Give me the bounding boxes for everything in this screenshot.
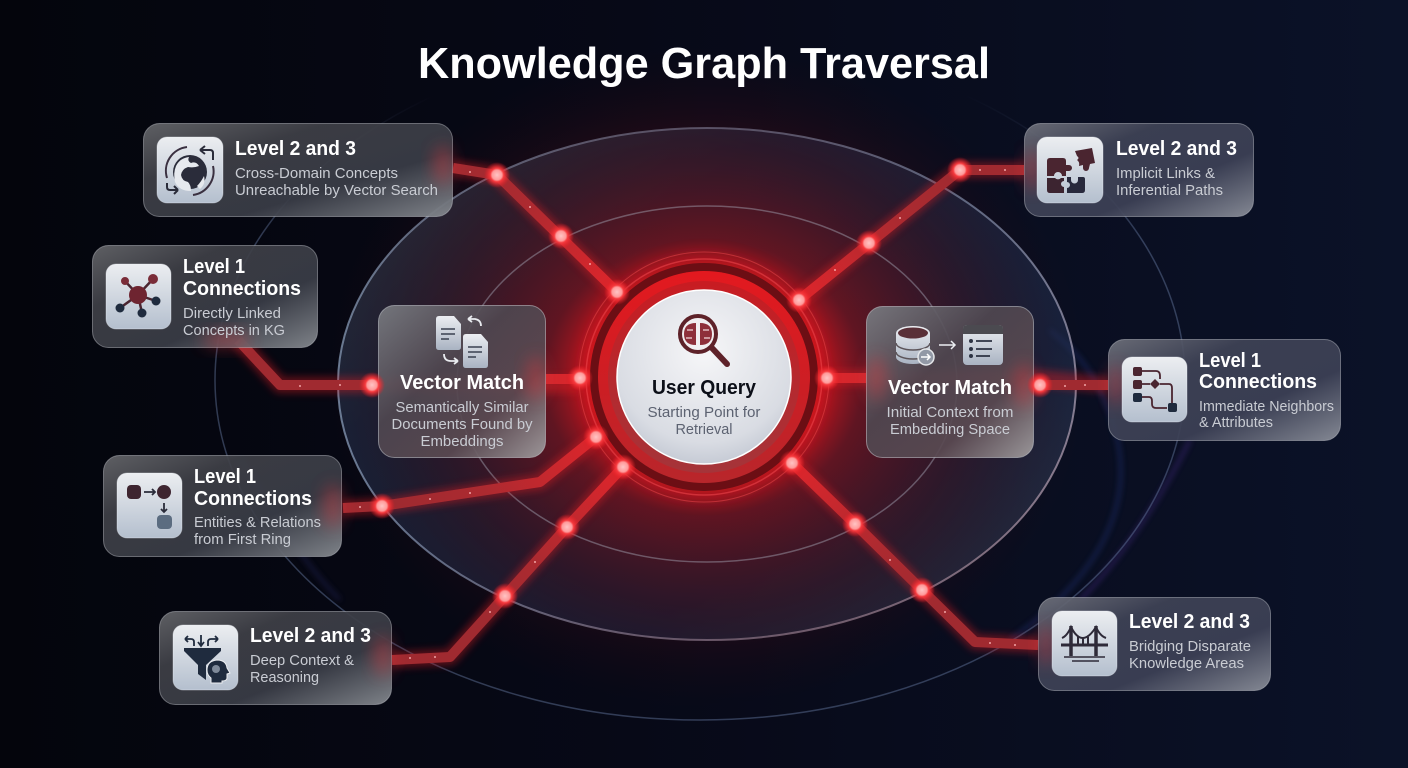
heading: Level 2 and 3 bbox=[235, 138, 356, 160]
heading: Level 2 and 3 bbox=[1116, 138, 1237, 160]
panel: level 2 and 3, implicit links bbox=[1024, 124, 1254, 216]
description: Concepts in KG bbox=[183, 322, 285, 339]
hub subtitle bbox=[648, 404, 760, 438]
heading: Level 2 and 3 bbox=[1129, 611, 1250, 633]
heading: Vector Match bbox=[888, 377, 1012, 399]
description bbox=[194, 514, 321, 548]
description bbox=[1199, 398, 1334, 431]
hub subtitle: Starting Point for bbox=[648, 404, 760, 421]
icon: entity flow bbox=[117, 473, 182, 538]
description: Inferential Paths bbox=[1116, 182, 1223, 199]
heading: Connections bbox=[183, 278, 301, 300]
description: Documents Found by bbox=[392, 416, 533, 433]
icon: flow diagram bbox=[1122, 357, 1187, 422]
description: Semantically Similar bbox=[396, 399, 528, 416]
panel: level 1, neighbors bbox=[1108, 340, 1340, 440]
panel: level 2 and 3, bridging bbox=[1038, 598, 1270, 690]
heading: Level 2 and 3 bbox=[250, 625, 371, 647]
description: & Attributes bbox=[1199, 414, 1273, 431]
description: Unreachable by Vector Search bbox=[235, 182, 438, 199]
heading: Level 1 bbox=[183, 256, 245, 278]
description bbox=[886, 404, 1014, 438]
panel: level 1, directly linked bbox=[92, 246, 318, 348]
description bbox=[1129, 638, 1251, 672]
description bbox=[392, 399, 533, 450]
link particles bbox=[299, 169, 1086, 659]
description bbox=[235, 165, 438, 199]
icon: network hub bbox=[106, 264, 171, 329]
panel: level 2 and 3, cross-domain bbox=[144, 124, 453, 216]
icon: funnel and head bbox=[173, 625, 238, 690]
panel: level 1, entities bbox=[104, 456, 343, 556]
icon: puzzle pieces bbox=[1037, 137, 1103, 203]
heading: Connections bbox=[1199, 371, 1317, 393]
heading: Level 1 bbox=[1199, 350, 1261, 372]
description: Immediate Neighbors bbox=[1199, 398, 1334, 415]
heading: Level 1 bbox=[194, 466, 256, 488]
hub title: User Query bbox=[652, 377, 757, 399]
title: Knowledge Graph Traversal bbox=[418, 39, 990, 88]
description bbox=[1116, 165, 1223, 199]
description bbox=[250, 652, 354, 686]
heading bbox=[1199, 350, 1317, 393]
description: Embedding Space bbox=[890, 421, 1010, 438]
central hub: User Query bbox=[579, 252, 829, 502]
icon: swapped documents bbox=[436, 316, 488, 368]
panel: level 2 and 3, deep context bbox=[160, 612, 393, 704]
description: Entities & Relations bbox=[194, 514, 321, 531]
description: Cross-Domain Concepts bbox=[235, 165, 398, 182]
icon: bridge bbox=[1052, 611, 1117, 676]
description: from First Ring bbox=[194, 531, 291, 548]
heading: Connections bbox=[194, 488, 312, 510]
heading bbox=[183, 256, 301, 300]
heading bbox=[194, 466, 312, 510]
panel: vector match right bbox=[866, 306, 1034, 458]
icon: database to list bbox=[896, 325, 1003, 365]
glowing nodes bbox=[359, 157, 1053, 609]
description: Knowledge Areas bbox=[1129, 655, 1244, 672]
hub subtitle: Retrieval bbox=[676, 421, 732, 438]
icon: brain magnifier bbox=[680, 316, 727, 364]
description: Directly Linked bbox=[183, 305, 281, 322]
traversal links bbox=[238, 168, 1108, 660]
heading: Vector Match bbox=[400, 372, 524, 394]
concentric knowledge rings bbox=[215, 40, 1185, 720]
description: Embeddings bbox=[420, 433, 504, 450]
panel: vector match left bbox=[378, 306, 546, 458]
description: Initial Context from bbox=[886, 404, 1014, 421]
description: Deep Context & bbox=[250, 652, 354, 669]
icon: globe cycle bbox=[157, 137, 223, 203]
description: Reasoning bbox=[250, 669, 319, 686]
description bbox=[183, 305, 285, 339]
description: Bridging Disparate bbox=[1129, 638, 1251, 655]
description: Implicit Links & bbox=[1116, 165, 1215, 182]
